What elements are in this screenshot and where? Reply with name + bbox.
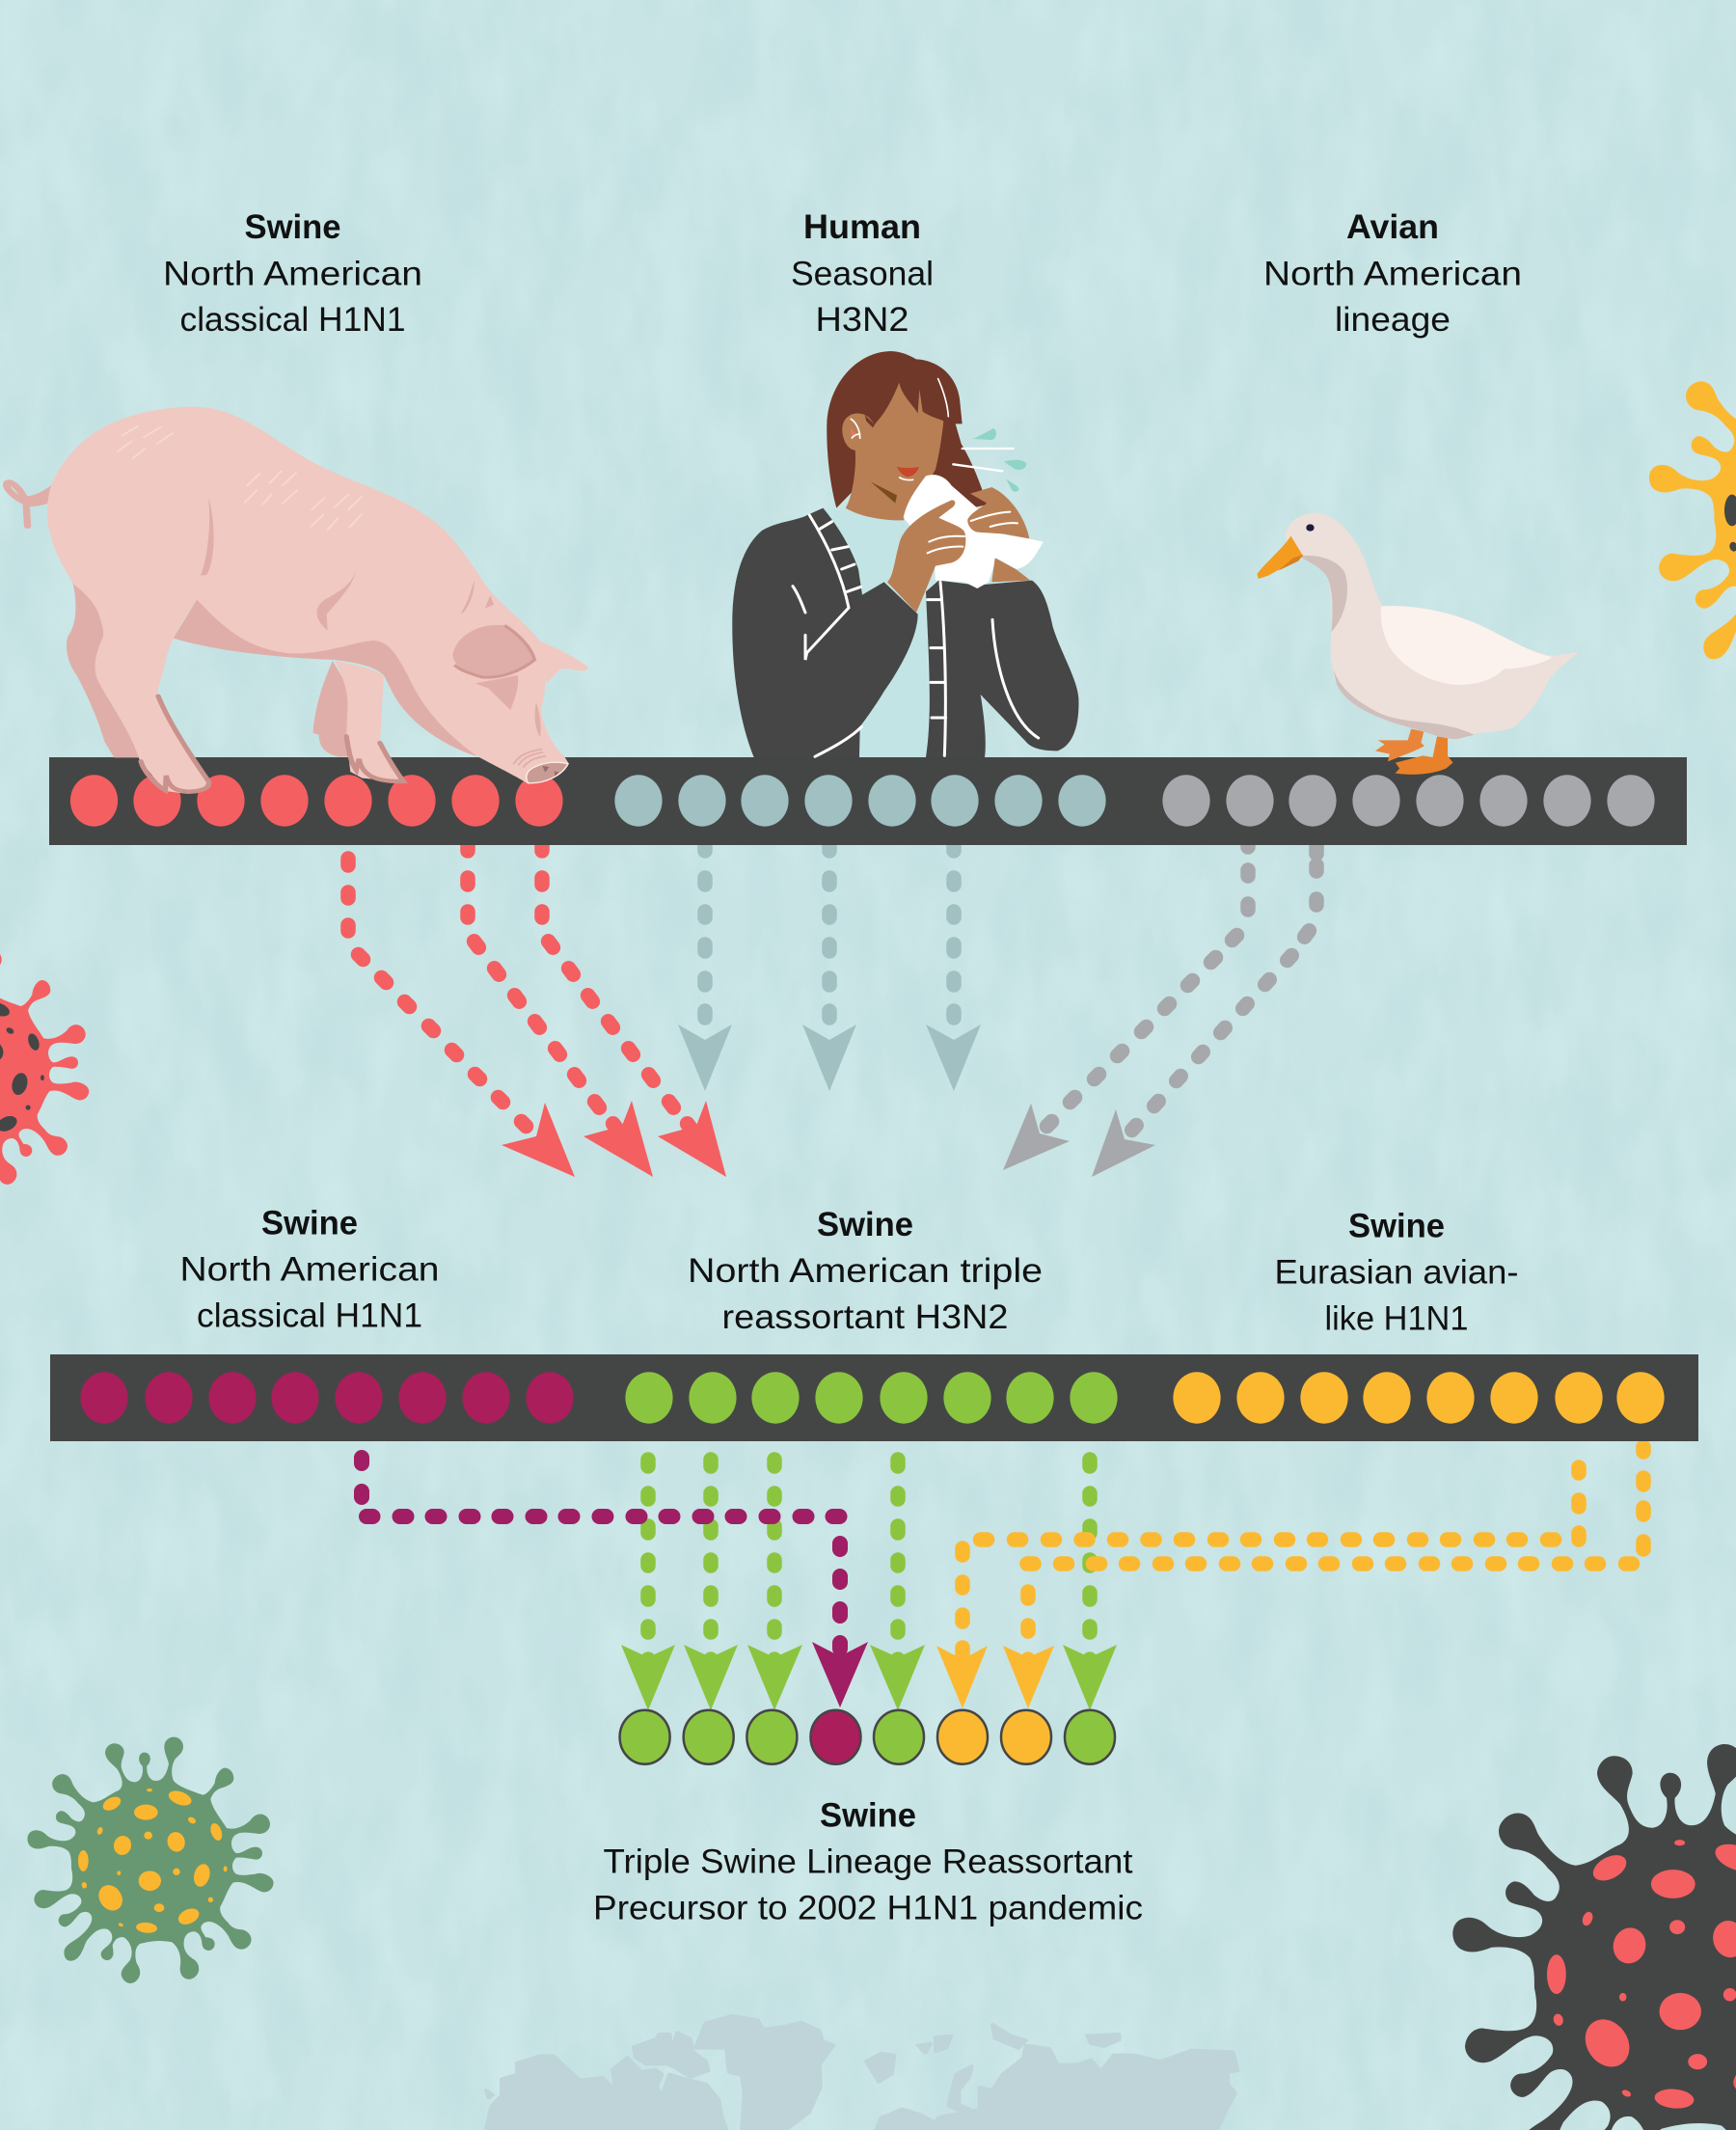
label: swine Eurasian: Swine (1348, 1208, 1445, 1244)
illustration: duck (1257, 513, 1580, 775)
right hand (967, 487, 1030, 582)
lower gene bar (50, 1354, 1698, 1441)
label: swine Eurasian (1275, 1208, 1518, 1337)
label: human seasonal: Seasonal (791, 255, 934, 293)
virus: dark, bottom right (1452, 1744, 1736, 2130)
label: swine classical (lower): Swine (261, 1204, 358, 1242)
label: swine Eurasian: like H1N1 (1325, 1300, 1468, 1337)
label: swine classical (top): classical H1N1 (179, 301, 405, 339)
swine classical dots (70, 775, 563, 827)
arrows: triple reassortant segments (green) (621, 1460, 1117, 1710)
human seasonal dots (614, 775, 1106, 827)
arrows: Eurasian avian-like segments (yellow) (936, 1447, 1643, 1708)
sweater right (926, 581, 1078, 757)
triple reassortant dots (625, 1372, 1118, 1424)
top gene bar (49, 757, 1687, 845)
arrows: swine classical segments (red) (348, 839, 726, 1177)
label: swine Eurasian: Eurasian avian- (1275, 1254, 1518, 1291)
virus: red, left edge (0, 950, 89, 1188)
duck beak (1257, 536, 1303, 579)
label: result (593, 1796, 1143, 1927)
duck belly shadow (1332, 661, 1475, 739)
duck neck shadow (1300, 556, 1347, 632)
arrows: classical H1N1 segment (purple) (362, 1458, 868, 1707)
label: swine classical (top): North American (163, 255, 422, 293)
label: avian (1263, 208, 1522, 339)
virus: yellow, right edge (1649, 326, 1736, 693)
label: human seasonal: H3N2 (816, 301, 909, 339)
tissue (904, 475, 1044, 588)
pig hooves (141, 696, 403, 792)
result gene row (620, 1710, 1115, 1764)
label: avian: North American (1263, 255, 1522, 293)
label: swine triple reassortant: reassortant H3N2 (721, 1298, 1009, 1336)
label: result: Triple Swine Lineage Reassortant (604, 1843, 1133, 1881)
sweater left (732, 508, 918, 757)
pig snout (527, 762, 568, 783)
label: human seasonal: Human (803, 208, 921, 246)
classical H1N1 dots (80, 1372, 574, 1424)
label: result: Swine (820, 1796, 916, 1835)
pig near ear (452, 625, 535, 677)
label: swine classical (top): Swine (245, 208, 341, 246)
pig shading folds (201, 499, 541, 737)
label: avian: lineage (1335, 301, 1451, 339)
illustration: pig (7, 407, 588, 794)
label: swine classical (lower): North American (179, 1250, 440, 1289)
left hand (887, 500, 965, 613)
arrows: human seasonal segments (teal) (678, 839, 981, 1091)
finger lines (928, 512, 1017, 553)
world map silhouette (486, 2015, 1238, 2130)
label: swine classical (lower): classical H1N1 (197, 1297, 422, 1335)
virus: green, bottom left (27, 1737, 274, 1983)
pig hair marks (118, 426, 362, 530)
label: human seasonal (791, 208, 934, 339)
label: result: Precursor to 2002 H1N1 pandemic (593, 1889, 1143, 1927)
sneeze droplets (972, 428, 1026, 492)
label: swine triple reassortant: Swine (817, 1206, 913, 1243)
illustration: sneezing woman (732, 351, 1078, 757)
pig right ear (541, 642, 588, 683)
label: avian: Avian (1346, 208, 1439, 246)
duck wing (1381, 606, 1553, 685)
label: swine classical (top) (163, 208, 422, 339)
arrows: avian segments (grey) (1003, 839, 1316, 1177)
label: swine triple reassortant (688, 1206, 1043, 1336)
shirt (823, 508, 929, 757)
avian dots (1162, 775, 1655, 827)
hair (827, 351, 987, 518)
face and neck (842, 383, 943, 520)
label: swine triple reassortant: North American triple (688, 1252, 1043, 1290)
sweater stitching (793, 515, 1039, 756)
label: swine classical (lower) (179, 1204, 440, 1335)
duck eye (1306, 524, 1315, 532)
Eurasian avian-like dots (1173, 1372, 1665, 1424)
